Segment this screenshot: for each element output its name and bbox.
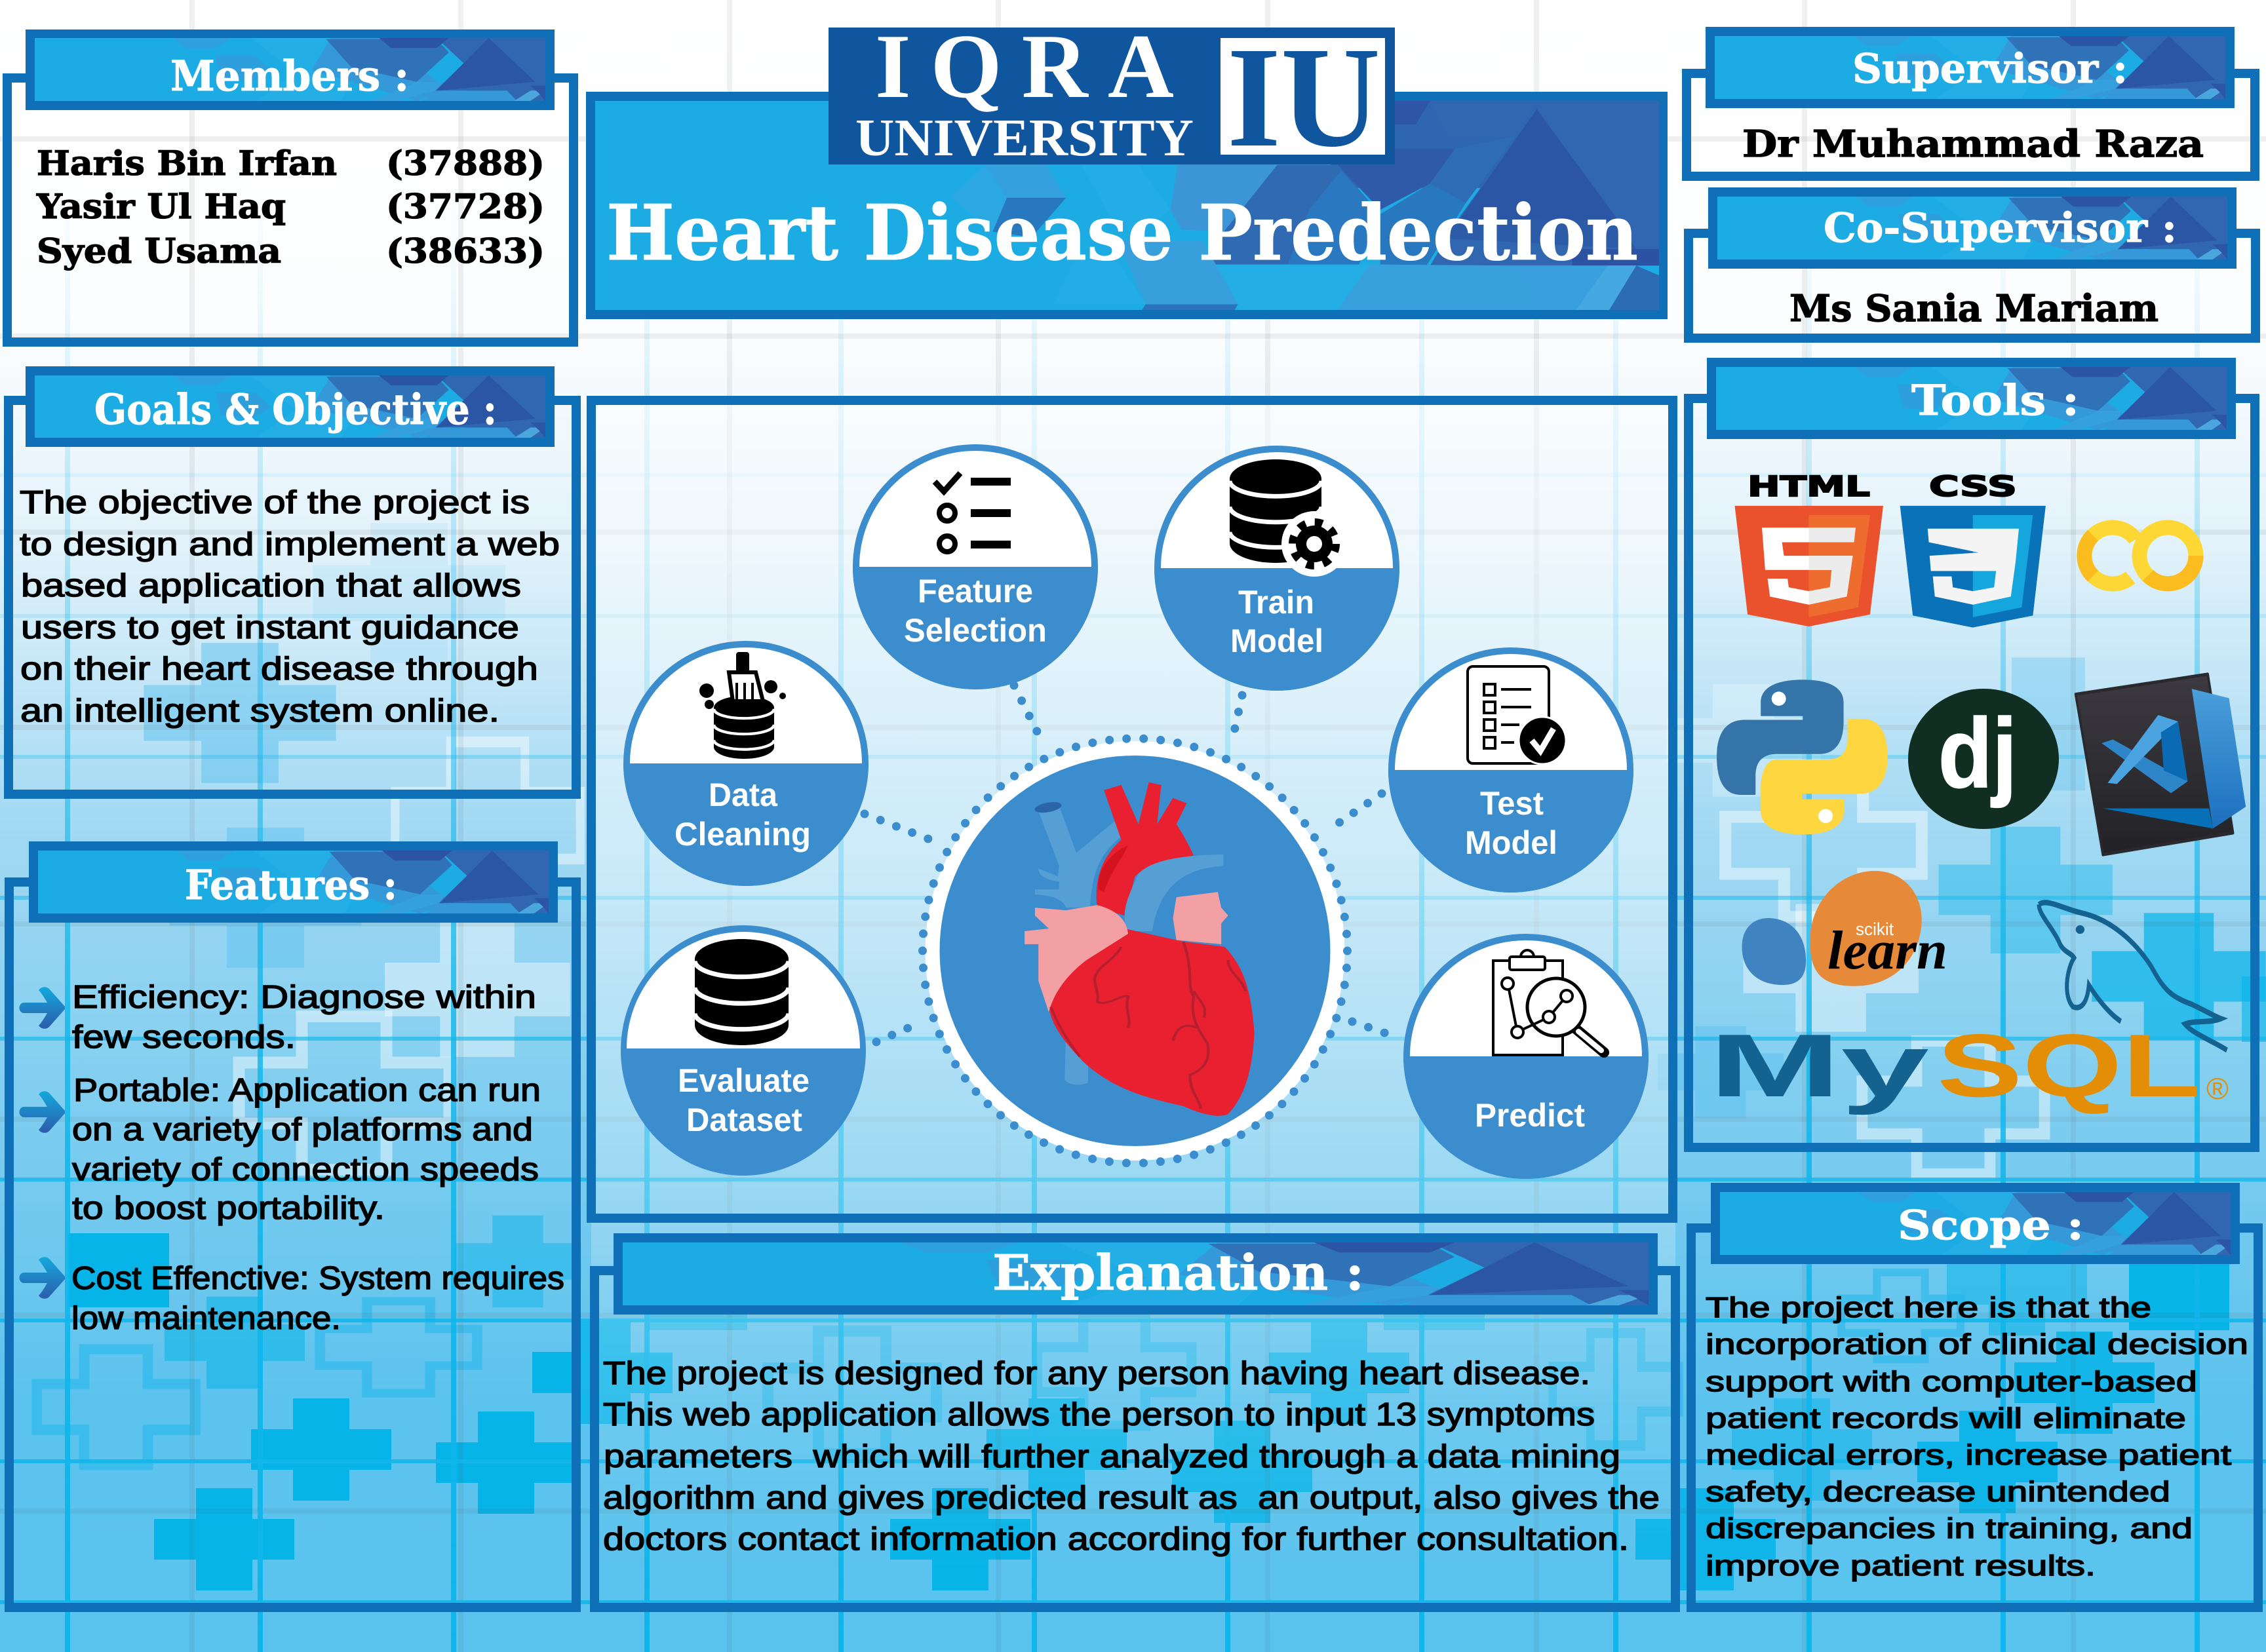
icon: clipboard and magnifier	[1493, 950, 1604, 1055]
node: predict: Predict	[1475, 1097, 1585, 1134]
icon: anatomical heart	[1025, 782, 1255, 1116]
feature: efficiency: few seconds.	[72, 1020, 296, 1055]
goals heading banner: Goals & Objective :	[94, 385, 497, 434]
node: evaluate dataset	[621, 925, 866, 1176]
logo: Iqra University: IU	[1227, 17, 1380, 177]
explanation text: This web application allows the person to input 13 symptoms	[603, 1397, 1595, 1432]
icon: database with gear	[1230, 459, 1347, 577]
goals text: based application that allows	[21, 568, 521, 604]
explanation text: The project is designed for any person having heart disease.	[603, 1356, 1590, 1391]
co-supervisor heading banner	[1708, 187, 2237, 269]
goals text: to design and implement a web	[20, 527, 560, 562]
tools heading banner: Tools :	[1911, 376, 2079, 425]
members list: (37888)	[386, 144, 545, 183]
explanation text	[603, 1356, 1660, 1557]
feature: portable: Portable: Application can run	[73, 1073, 541, 1108]
icon: Django: dj	[1938, 698, 2017, 808]
scope text: incorporation of clinical decision	[1706, 1328, 2248, 1360]
goals text	[20, 485, 560, 729]
supervisor name: Dr Muhammad Raza	[1742, 123, 2204, 166]
co-supervisor name: Ms Sania Mariam	[1789, 287, 2159, 330]
feature: portable: variety of connection speeds	[72, 1152, 539, 1187]
members heading banner	[26, 29, 555, 110]
node: test model	[1388, 651, 1633, 893]
supervisor heading banner	[1706, 27, 2235, 108]
icon: arrow 1	[20, 987, 65, 1029]
explanation text: parameters which will further analyzed through a data mining	[604, 1439, 1620, 1474]
icon: brush on database	[699, 652, 786, 759]
icon: CSS3: CSS	[1929, 471, 2017, 503]
panel: co-supervisor	[1689, 187, 2256, 338]
logo: MySQL wordmark: SQL	[1937, 1016, 2200, 1115]
members list: Haris Bin Irfan	[37, 144, 337, 183]
node: data cleaning: Data	[709, 777, 778, 813]
goals text: users to get instant guidance	[21, 610, 519, 645]
feature: cost effective: Cost Effenctive: System requires	[71, 1261, 564, 1296]
scope text: discrepancies in training, and	[1706, 1512, 2193, 1545]
icon: arrow 3	[20, 1257, 65, 1299]
logo: MySQL wordmark: My	[1709, 1016, 1929, 1115]
explanation text: doctors contact information according for further consultation.	[603, 1522, 1629, 1557]
goals text: on their heart disease through	[20, 651, 538, 687]
icon: scikit-learn	[1742, 871, 1947, 986]
logo: Iqra University: UNIVERSITY	[855, 109, 1194, 167]
scope text: improve patient results.	[1706, 1550, 2096, 1582]
logo: MySQL wordmark: ®	[2206, 1071, 2229, 1105]
members heading banner: Members :	[170, 52, 409, 101]
node: feature selection: Selection	[904, 612, 1047, 649]
icon: HTML5: HTML	[1748, 471, 1870, 503]
icon: CSS3	[1900, 471, 2046, 628]
scope text: safety, decrease unintended	[1706, 1476, 2170, 1508]
members list: Syed Usama	[37, 232, 281, 271]
panel: features	[9, 841, 576, 1607]
scope text: The project here is that the	[1706, 1292, 2151, 1324]
feature: portable	[72, 1073, 541, 1226]
members list: (38633)	[386, 232, 545, 271]
panel: tools	[1689, 358, 2255, 1147]
node: feature selection: Feature	[918, 573, 1033, 609]
panel: title banner	[586, 16, 1668, 319]
icon: arrow 2	[20, 1091, 65, 1133]
panel: goals and objective	[9, 366, 576, 794]
members list: (37728)	[386, 187, 545, 227]
central heart circle	[923, 739, 1348, 1163]
logo: MySQL wordmark	[1709, 1016, 2229, 1115]
tools heading banner	[1707, 358, 2236, 439]
goals text: an intelligent system online.	[20, 693, 499, 729]
connector dots	[865, 685, 1397, 1042]
icon: Python	[1717, 680, 1888, 834]
node: train model	[1154, 449, 1399, 691]
node: train model: Model	[1230, 623, 1323, 659]
panel: members	[7, 29, 574, 342]
title: Heart Disease Predection	[606, 189, 1638, 278]
goals heading banner	[26, 366, 555, 447]
node: predict	[1403, 937, 1649, 1179]
node: data cleaning	[623, 644, 869, 886]
node: feature selection	[853, 448, 1098, 689]
scope text: patient records will eliminate	[1706, 1402, 2186, 1434]
feature: cost effective	[71, 1261, 564, 1336]
icon: HTML5	[1735, 471, 1883, 626]
features heading banner	[29, 841, 558, 923]
members list	[36, 144, 545, 271]
scope text: medical errors, increase patient	[1706, 1439, 2231, 1471]
feature: efficiency	[72, 980, 536, 1055]
goals text: The objective of the project is	[20, 485, 530, 520]
scope heading banner	[1711, 1183, 2240, 1264]
feature: portable: to boost portability.	[72, 1191, 385, 1226]
icon: scikit-learn: scikit	[1856, 919, 1894, 939]
node: data cleaning: Cleaning	[674, 816, 811, 853]
node: evaluate dataset: Dataset	[686, 1102, 802, 1138]
icon: Colab	[2084, 528, 2196, 584]
panel: supervisor	[1687, 27, 2255, 176]
logo: Iqra University: IQRA	[875, 16, 1174, 117]
node: test model: Test	[1480, 785, 1544, 822]
panel: workflow diagram	[591, 400, 1673, 1218]
feature: efficiency: Efficiency: Diagnose within	[72, 980, 536, 1015]
icon: checklist	[935, 473, 1011, 552]
explanation heading banner: Explanation :	[992, 1245, 1364, 1301]
scope text: support with computer-based	[1706, 1366, 2197, 1398]
icon: Django	[1908, 689, 2059, 829]
supervisor heading banner: Supervisor :	[1852, 45, 2128, 92]
scope text	[1706, 1292, 2248, 1582]
members list: Yasir Ul Haq	[36, 187, 286, 227]
icon: VS Code	[2076, 674, 2246, 855]
icon: test document	[1468, 666, 1566, 764]
node: test model: Model	[1465, 824, 1557, 861]
icon: MySQL dolphin	[2039, 902, 2227, 1050]
scope heading banner: Scope :	[1898, 1201, 2084, 1249]
icon: database	[695, 939, 789, 1045]
explanation text: algorithm and gives predicted result as an output, also gives the	[603, 1480, 1660, 1516]
node: evaluate dataset: Evaluate	[678, 1062, 810, 1099]
feature: portable: on a variety of platforms and	[72, 1112, 533, 1147]
icon: scikit-learn: learn	[1827, 920, 1947, 981]
explanation heading banner	[614, 1233, 1658, 1315]
feature: cost effective: low maintenance.	[71, 1301, 341, 1336]
node: train model: Train	[1238, 584, 1314, 621]
co-supervisor heading banner: Co-Supervisor :	[1824, 204, 2177, 252]
features heading banner: Features :	[185, 861, 397, 909]
logo: Iqra University	[829, 16, 1395, 177]
panel: explanation	[595, 1233, 1675, 1607]
panel: scope	[1691, 1183, 2258, 1607]
